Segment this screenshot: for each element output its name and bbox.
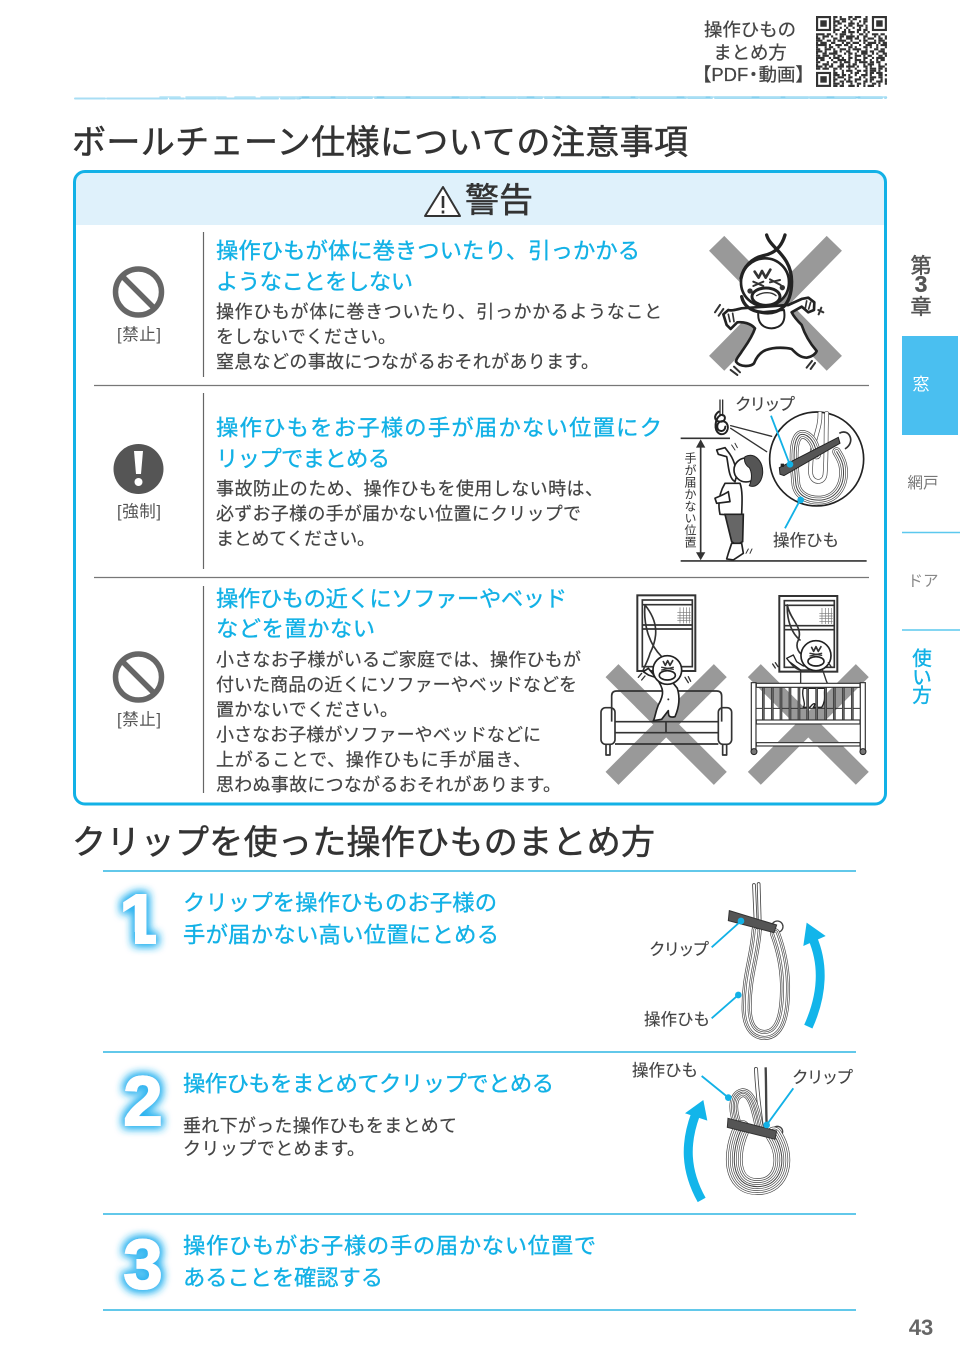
row 2 body: まとめてください。 xyxy=(216,529,375,549)
top brush line xyxy=(75,97,886,98)
vertical label: out of reach height: 手が届かない位置 xyxy=(683,452,697,549)
step 3 xyxy=(124,1225,596,1303)
label: clip: クリップ xyxy=(792,1068,854,1087)
chapter label: 章 xyxy=(910,296,932,319)
step separators xyxy=(103,871,856,1310)
tab: usage xyxy=(912,648,932,707)
label: clip: クリップ xyxy=(649,940,710,959)
row 2 body: 事故防止のため、操作ひもを使用しない時は、 xyxy=(216,479,603,499)
row 2: clip the cord xyxy=(114,395,867,561)
row 3: no furniture near cord xyxy=(116,586,866,795)
QR caption: 【PDF・動画】 xyxy=(693,64,814,85)
row 2 heading xyxy=(216,416,662,472)
row 1 body: 窒息などの事故につながるおそれがあります。 xyxy=(216,352,599,372)
step 2 body: 垂れ下がった操作ひもをまとめて xyxy=(183,1116,457,1136)
warning panel border xyxy=(74,172,886,804)
panel: warning xyxy=(74,172,886,804)
label: clip: クリップ xyxy=(735,395,796,414)
QR caption: 操作ひもの xyxy=(704,19,796,40)
step number 2: 2 xyxy=(124,1062,162,1140)
row 3 body: 置かないでください。 xyxy=(216,700,398,720)
step 1 heading xyxy=(183,890,499,948)
chapter label xyxy=(910,255,932,319)
title: ball chain cautions: ボールチェーン仕様についての注意事項 xyxy=(72,124,688,162)
row 3 body xyxy=(216,650,581,795)
label: cord: 操作ひも xyxy=(773,531,839,550)
page number: 43 xyxy=(909,1315,933,1340)
icon: warning triangle xyxy=(425,187,460,216)
dividers xyxy=(94,386,869,578)
row 1 heading: 操作ひもが体に巻きついたり、引っかかる xyxy=(216,238,640,264)
tab: door: ドア xyxy=(907,573,939,590)
warning panel header band xyxy=(74,172,886,225)
step 3 heading xyxy=(183,1234,596,1290)
icon: prohibited xyxy=(116,654,162,700)
active tab: window: 窓 xyxy=(912,375,930,394)
QR code xyxy=(816,17,887,86)
illustration: bundled cord in clip xyxy=(685,1067,793,1200)
tab: screen: 網戸 xyxy=(907,474,939,492)
row 1 body xyxy=(216,302,662,372)
QR caption: まとめ方 xyxy=(713,42,787,63)
row 1 heading xyxy=(216,238,640,294)
row 1 body: 操作ひもが体に巻きついたり、引っかかるようなこと xyxy=(216,302,662,322)
label: prohibited: [禁止] xyxy=(117,710,161,729)
side navigation xyxy=(902,255,960,707)
row 3 body: 思わぬ事故につながるおそれがあります。 xyxy=(216,775,561,795)
row 1 heading: ようなことをしない xyxy=(216,270,413,294)
chapter label: 3 xyxy=(915,271,927,297)
step 1 xyxy=(120,880,826,1035)
tab: usage: い xyxy=(912,667,932,689)
title: how to bundle with clip: クリップを使った操作ひものまとめ方 xyxy=(72,824,655,862)
QR caption xyxy=(693,19,814,85)
row 3 body: 小さなお子様がいるご家庭では、操作ひもが xyxy=(216,650,581,670)
step 3 heading: あることを確認する xyxy=(183,1266,383,1290)
tab: usage: 使 xyxy=(912,648,932,670)
row 3 body: 付いた商品の近くにソファーやベッドなどを xyxy=(216,675,577,695)
illustration: baby tangled in cord xyxy=(715,235,834,375)
label: cord: 操作ひも xyxy=(644,1010,710,1029)
step 3 heading: 操作ひもがお子様の手の届かない位置で xyxy=(183,1234,596,1258)
row 1: cord entanglement xyxy=(116,235,834,375)
illustration: clip high on cord xyxy=(712,884,826,1035)
row 3 body: 上がることで、操作ひもに手が届き、 xyxy=(216,750,531,770)
step 2 xyxy=(124,1061,854,1200)
illustration: child in crib by window xyxy=(751,596,866,778)
step number 1: 1 xyxy=(120,880,158,958)
illustration: child on sofa by window xyxy=(601,595,732,778)
icon: prohibited xyxy=(116,269,162,315)
step 1 heading: 手が届かない高い位置にとめる xyxy=(183,922,499,948)
chapter label: 第 xyxy=(910,255,932,278)
step 2 body: クリップでとめます。 xyxy=(183,1139,365,1159)
row 1 body: をしないでください。 xyxy=(216,327,396,347)
illustration: boy reaching, clipped cord xyxy=(681,400,867,561)
step number 3: 3 xyxy=(124,1225,162,1303)
row 3 heading: 操作ひもの近くにソファーやベッド xyxy=(216,586,567,612)
row 3 heading: などを置かない xyxy=(216,616,375,642)
row 2 body xyxy=(216,479,603,549)
icon: mandatory xyxy=(114,444,164,494)
label: prohibited: [禁止] xyxy=(117,325,161,344)
step 2 heading: 操作ひもをまとめてクリップでとめる xyxy=(183,1072,554,1096)
step 1 heading: クリップを操作ひものお子様の xyxy=(183,890,497,916)
row 2 body: 必ずお子様の手が届かない位置にクリップで xyxy=(216,504,581,524)
row 2 heading: 操作ひもをお子様の手が届かない位置にク xyxy=(216,416,662,440)
tab: usage: 方 xyxy=(912,685,932,707)
step 2 body xyxy=(183,1116,457,1159)
warning heading: 警告 xyxy=(465,182,533,220)
active tab: window xyxy=(902,336,958,435)
row 3 body: 小さなお子様がソファーやベッドなどに xyxy=(216,725,541,745)
label: cord: 操作ひも xyxy=(632,1061,698,1080)
row 3 heading xyxy=(216,586,567,642)
label: mandatory: [強制] xyxy=(117,502,161,521)
row 2 heading: リップでまとめる xyxy=(216,446,390,472)
